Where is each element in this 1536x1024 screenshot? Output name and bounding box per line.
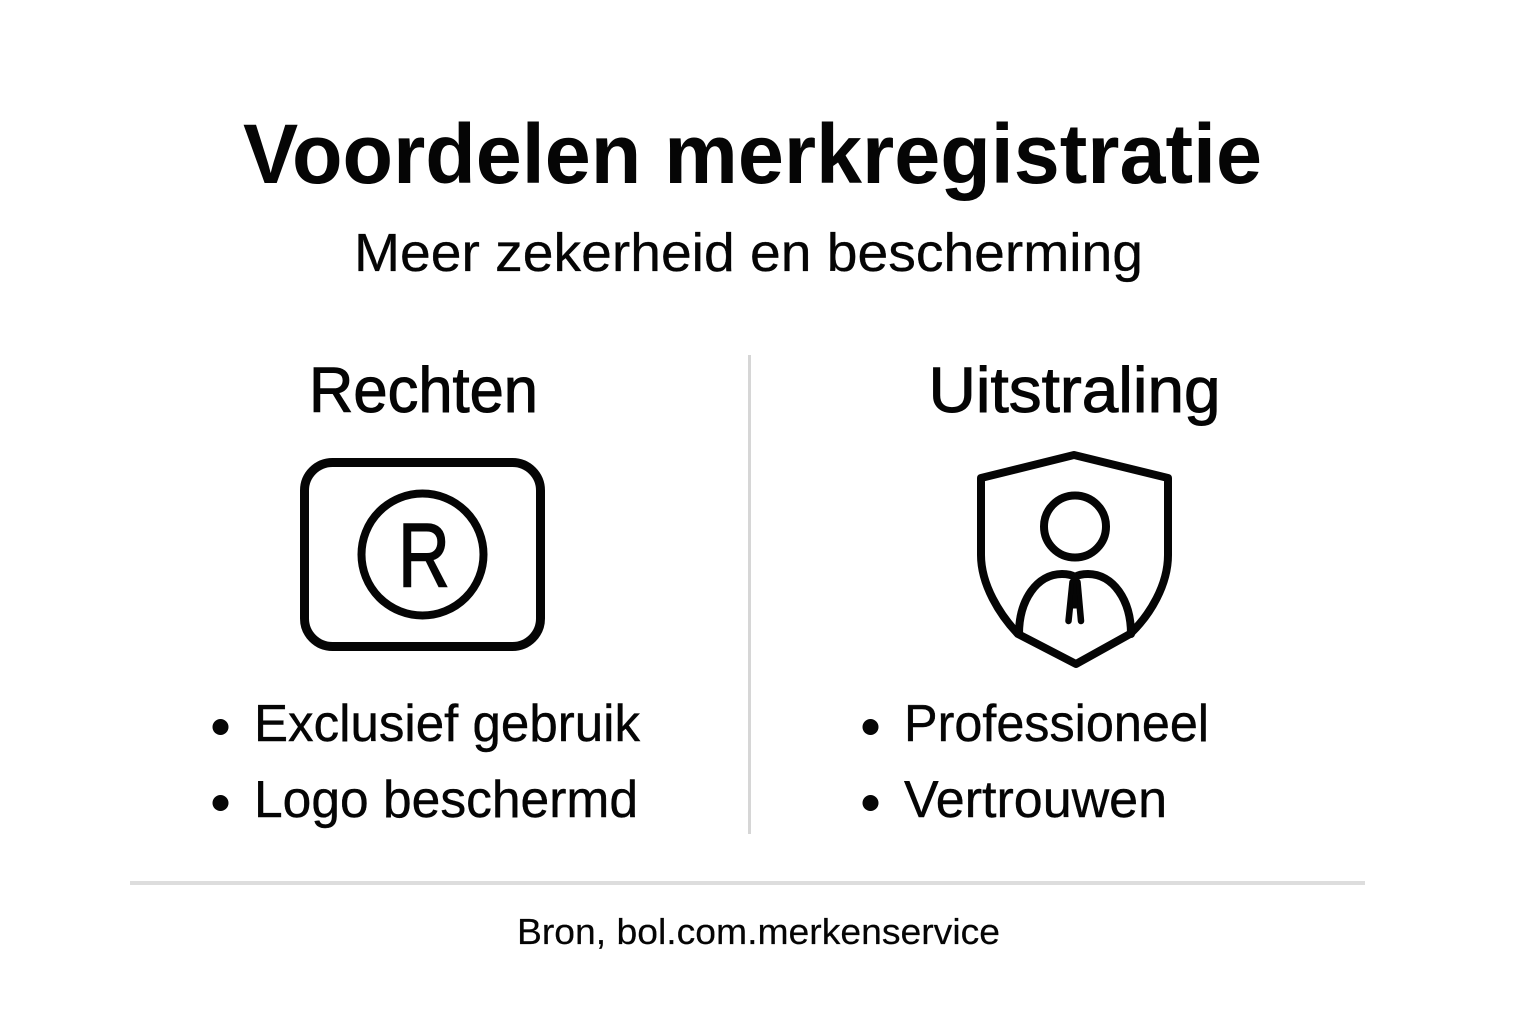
- bullet list: Uitstraling: [862, 695, 1209, 829]
- vertical divider: [748, 355, 751, 834]
- bullet list: Uitstraling: Vertrouwen: [904, 771, 1167, 829]
- footer divider: [130, 881, 1365, 885]
- icon: registered trademark: [304, 462, 540, 646]
- heading: Rechten: Rechten: [309, 354, 538, 426]
- title: Voordelen merkregistratie: [243, 107, 1262, 201]
- bullet list: Uitstraling: Professioneel: [904, 695, 1209, 753]
- bullet list: Rechten: [212, 695, 641, 829]
- bullet list: Rechten: Exclusief gebruik: [254, 695, 641, 753]
- icon: registered trademark: R: [398, 506, 450, 606]
- bullet list: Rechten: Logo beschermd: [254, 771, 638, 829]
- subtitle: Meer zekerheid en bescherming: [354, 223, 1143, 283]
- heading: Uitstraling: Uitstraling: [928, 354, 1220, 426]
- icon: shield with person: [981, 455, 1168, 664]
- source note: Bron, bol.com.merkenservice: [517, 911, 1000, 952]
